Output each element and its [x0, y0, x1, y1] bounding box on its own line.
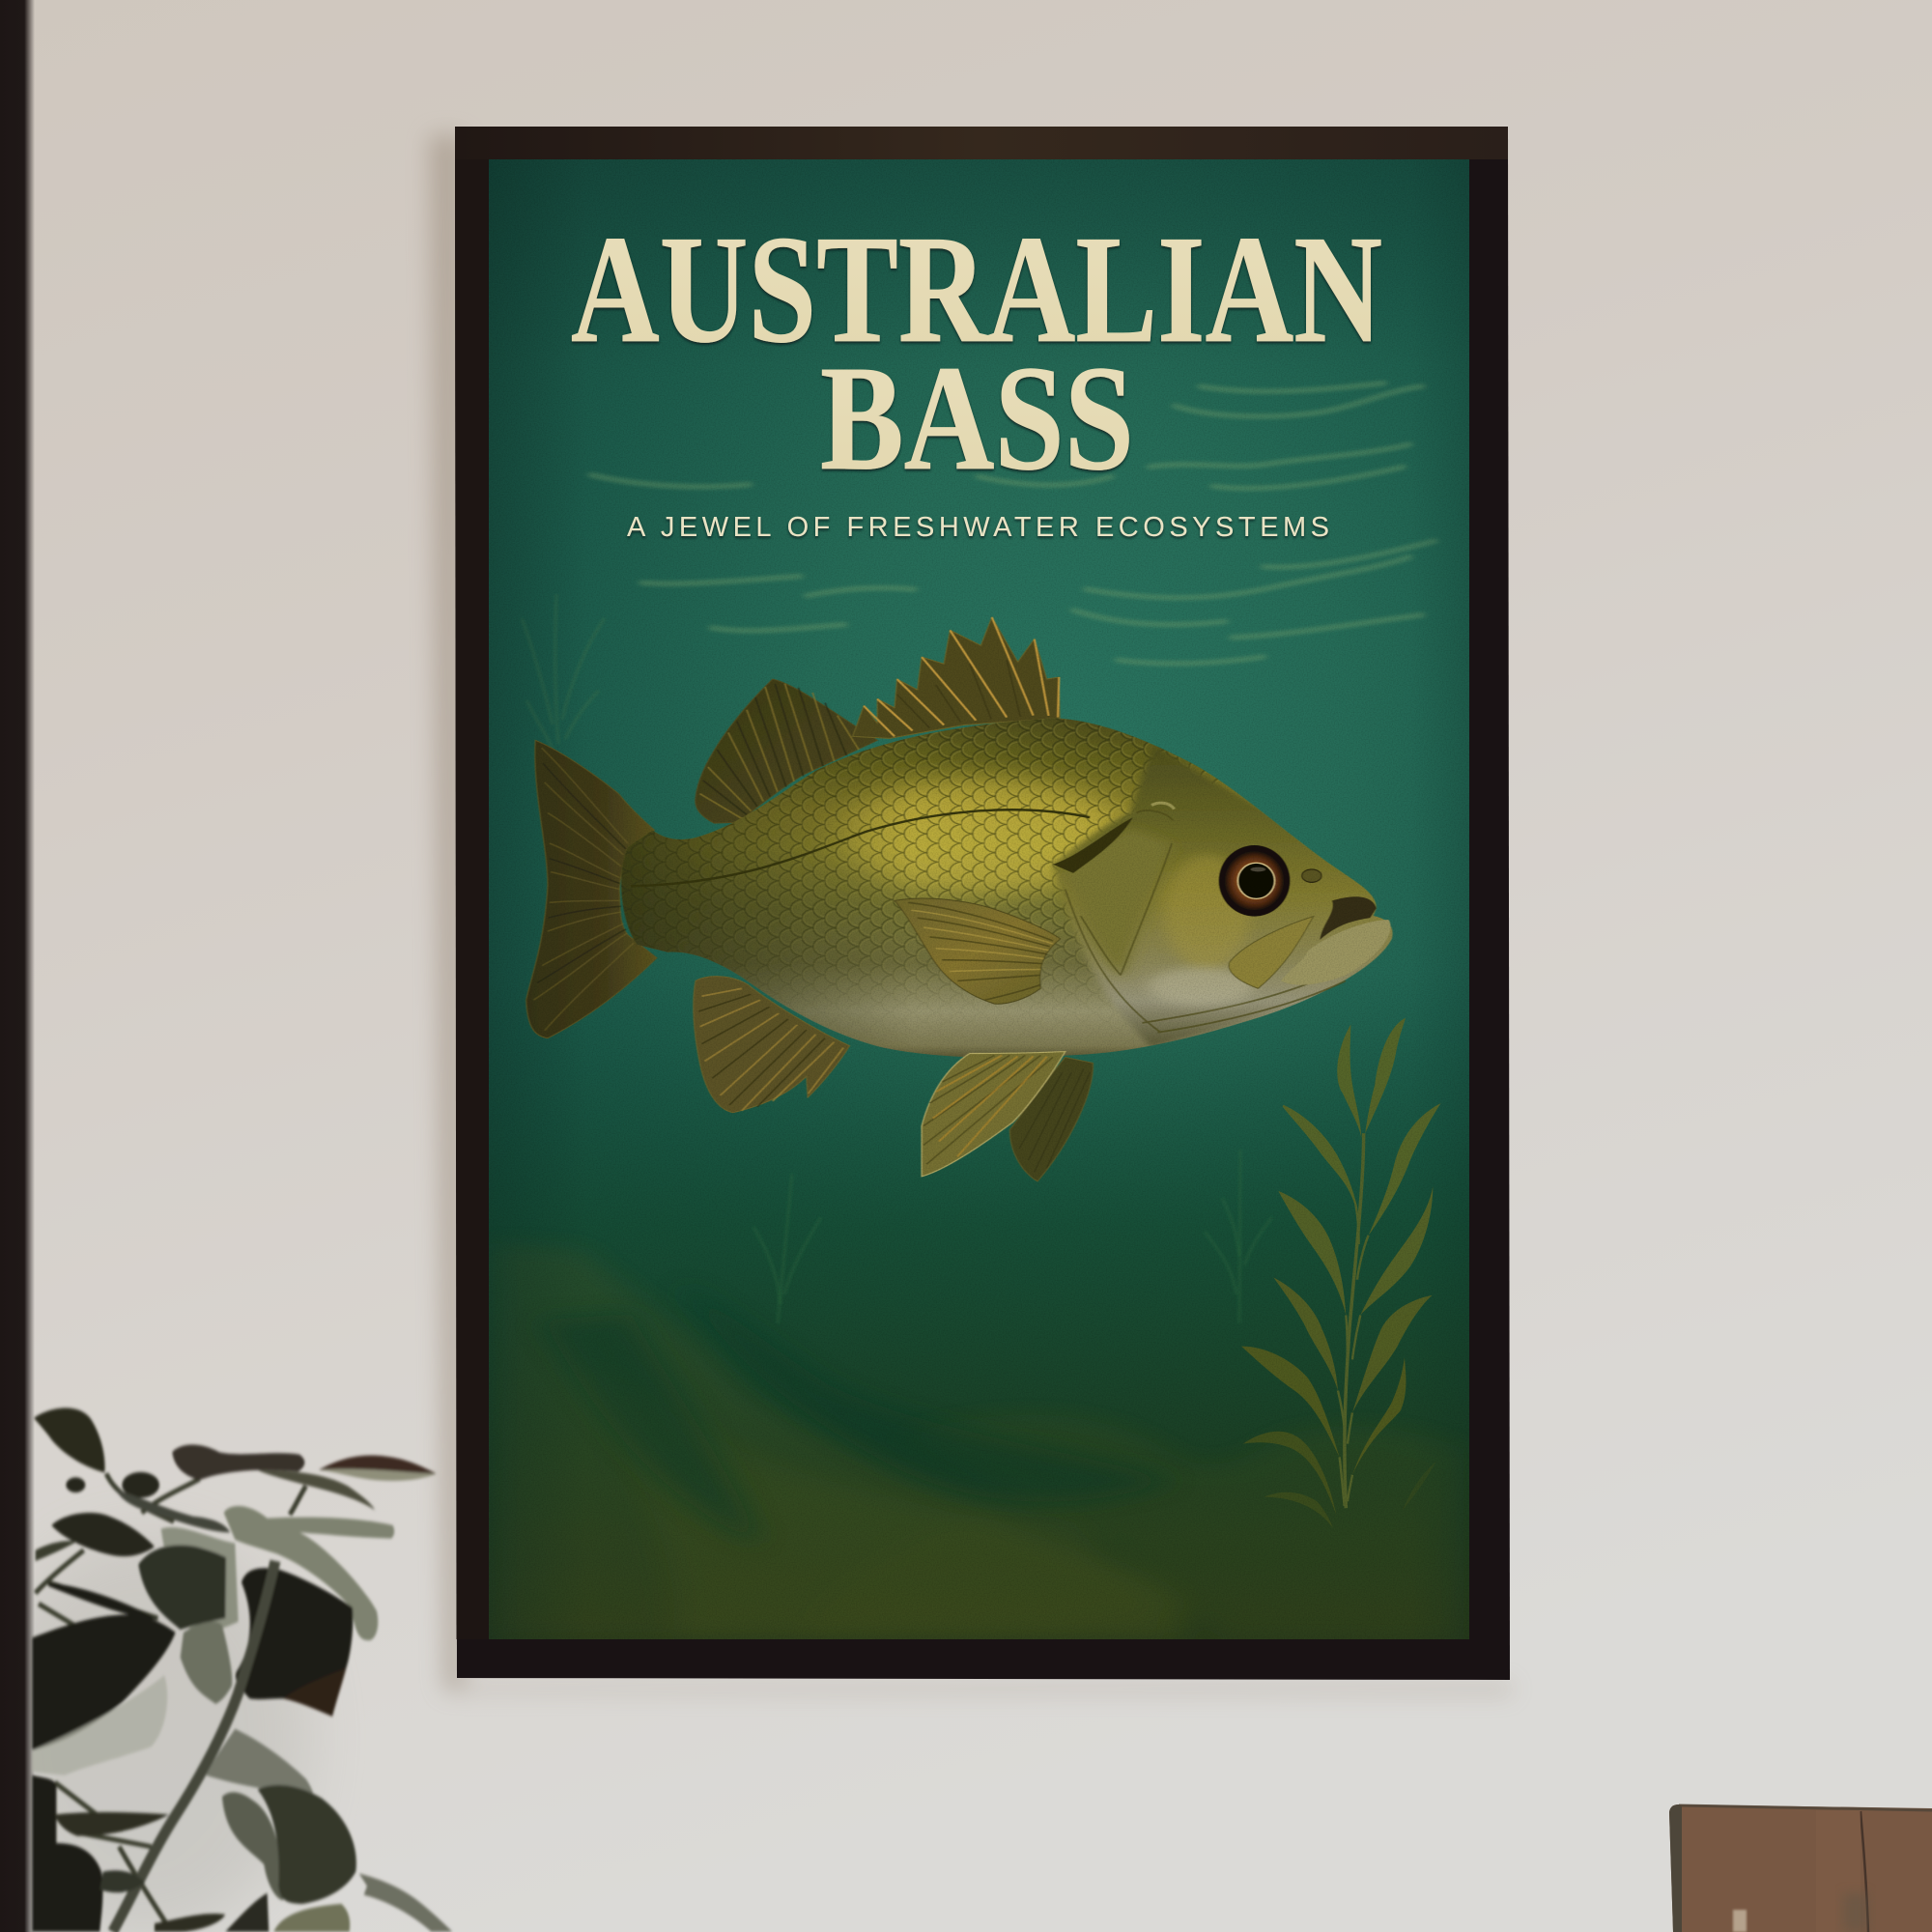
water ripples: [591, 384, 1435, 664]
poster: [489, 159, 1469, 1639]
leaf: top dark: [172, 1445, 304, 1480]
berries: [66, 1472, 159, 1498]
lower cheek pale: [1149, 968, 1253, 1006]
title line: Bass: BASS: [820, 334, 1134, 501]
leaf: lower round dark: [258, 1785, 356, 1904]
leaf: top right dark edge: [319, 1456, 437, 1473]
leaf: upper left: [34, 1408, 105, 1472]
fish body: [621, 718, 1393, 1058]
title: [571, 203, 1382, 501]
nostril: [1302, 869, 1321, 882]
body scales: [607, 706, 1222, 1068]
leaf: lower pale left: [32, 1675, 167, 1776]
seabed depth gradient: [489, 159, 1469, 1639]
faint weed upper left: [522, 594, 605, 749]
cheek glow: [1164, 855, 1250, 970]
leaf: long thin dark: [48, 1582, 159, 1620]
wooden object bottom right: [1669, 1804, 1932, 1932]
frame shadow on wall: [430, 135, 1512, 1692]
leaf: top branch: [258, 1470, 375, 1510]
eye: [1219, 845, 1291, 917]
fin: soft dorsal: [696, 679, 877, 823]
fin: pectoral: [895, 898, 1061, 1004]
leaf: bottom left dark mass: [32, 1776, 102, 1932]
fin: anal: [694, 977, 849, 1113]
potted plant: [32, 1408, 452, 1932]
upper lip and mouth: [1320, 896, 1377, 940]
leaf: left dark: [51, 1513, 155, 1556]
maxilla: [1229, 917, 1314, 988]
leaf: pale top right: [224, 1506, 394, 1640]
leaf: pale center: [161, 1527, 239, 1632]
leaf: bottom left spray: [55, 1812, 169, 1836]
leaf: top right: [319, 1456, 437, 1481]
fin: spiny dorsal: [853, 617, 1060, 738]
foreground weed: [1241, 1018, 1441, 1528]
foreground dark vertical edge: [0, 0, 35, 1932]
leaf: small stem leaf: [116, 1490, 230, 1532]
paper grain: [489, 159, 1469, 1639]
fin: tail: [526, 740, 657, 1038]
head contour lines: [1065, 810, 1364, 1033]
leaf: lower grey: [206, 1729, 314, 1799]
lower jaw: [1281, 920, 1391, 985]
picture frame: [455, 127, 1510, 1680]
leaf: lower right thin: [359, 1873, 452, 1932]
leaf: center dark: [138, 1546, 226, 1630]
gill cover: [1065, 828, 1172, 977]
poster side shading: [489, 159, 1469, 1639]
leaf: bottom pale green: [273, 1904, 350, 1932]
seabed shadows: [549, 1313, 1156, 1538]
leaf: center lower pale: [181, 1622, 232, 1704]
body golden sheen: [840, 779, 1123, 893]
leaf: large dark right warm tip: [283, 1668, 346, 1717]
plant stems: [36, 1473, 306, 1925]
seabed sediment mounds: [493, 1243, 1463, 1639]
leaf: big left dark: [32, 1614, 176, 1750]
leaf: large dark right: [236, 1568, 353, 1717]
fin: ventral: [922, 1052, 1065, 1177]
faint weeds lower: [764, 1235, 1241, 1321]
leaf: lower round grey: [222, 1792, 283, 1900]
subtitle: A JEWEL OF FRESHWATER ECOSYSTEMS: [627, 512, 1329, 543]
lateral line: [631, 810, 1090, 886]
fish: [526, 617, 1407, 1181]
fish head: [1053, 746, 1407, 1048]
title line: Australian: AUSTRALIAN: [571, 203, 1382, 375]
main stem: [113, 1561, 275, 1932]
gill slit: [1053, 817, 1133, 873]
blurred wall tone behind plant: [0, 1536, 309, 1932]
fin: rear ventral: [1009, 1057, 1093, 1181]
poster water background: [489, 159, 1469, 1389]
